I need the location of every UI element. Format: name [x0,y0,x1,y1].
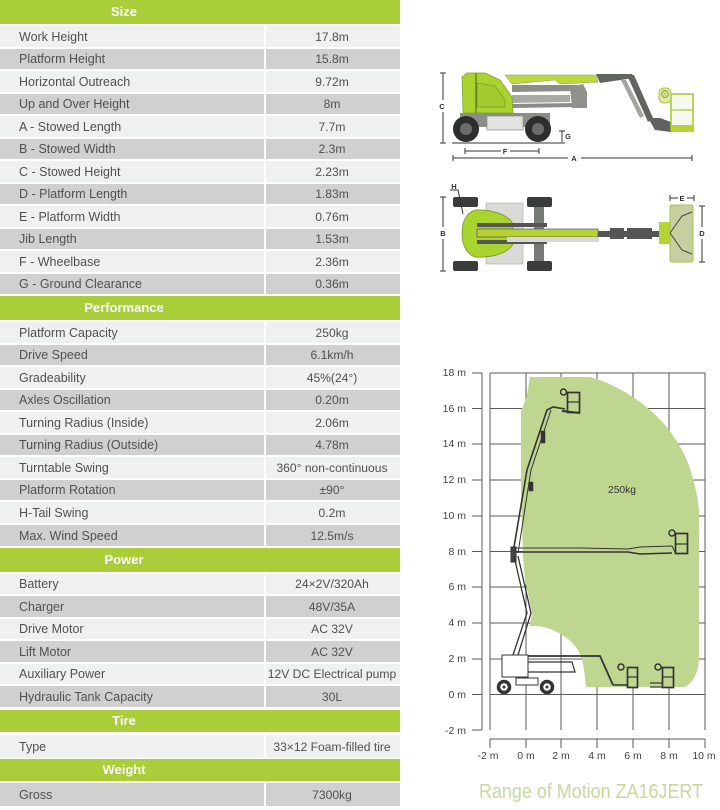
y axis labels: -2 m [445,725,466,737]
row: Platform Rotation: Platform Rotation [19,483,116,497]
row: A - Stowed Length: A - Stowed Length [19,120,121,134]
row: Type: Type [19,740,46,754]
heading: Tire: Tire [112,713,136,728]
row: Platform Height: 15.8m [315,52,349,66]
row: Work Height [0,26,400,47]
row: Max. Wind Speed: Max. Wind Speed [19,528,118,542]
icon: platform from above [659,205,693,262]
row: F - Wheelbase [0,251,400,272]
row: H-Tail Swing: 0.2m [319,506,345,520]
row: C - Stowed Height: C - Stowed Height [19,164,120,178]
row: Battery [0,574,400,594]
icon: platform [659,88,694,132]
diagram: side view of lift [439,73,694,163]
y axis labels: 4 m [448,617,466,629]
dimension lines and letters [440,73,692,161]
row: Max. Wind Speed: 12.5m/s [310,528,354,542]
row: Type: 33×12 Foam-filled tire [273,740,391,754]
x axis labels: 8 m [660,750,678,762]
dimension labels: B [440,229,446,238]
heading: Power [0,548,400,572]
row: Hydraulic Tank Capacity: Hydraulic Tank Capacity [19,690,153,704]
row: Turntable Swing: Turntable Swing [19,460,109,474]
row: Charger: Charger [19,600,64,614]
row: Turntable Swing: 360° non-continuous [276,460,388,474]
icon: axle [534,207,544,261]
row: Turning Radius (Outside): 4.78m [315,438,349,452]
row: G - Ground Clearance: G - Ground Clearance [19,277,142,291]
dimension labels: G [565,132,571,141]
row: Jib Length: 1.53m [315,232,349,246]
lift at full height [513,389,580,553]
row: Turntable Swing [0,457,400,478]
working envelope [521,377,699,687]
heading: Performance: Performance [84,300,164,315]
row: Work Height: Work Height [19,30,88,44]
grid [472,373,705,748]
x axis labels: 4 m [588,750,606,762]
row: Up and Over Height [0,94,400,114]
heading: Size: Size [111,4,137,19]
y axis labels: 0 m [448,689,466,701]
row: A - Stowed Length: 7.7m [319,120,345,134]
row: Drive Motor: AC 32V [311,622,353,636]
row: C - Stowed Height: 2.23m [315,164,349,178]
row: Lift Motor: Lift Motor [19,644,71,658]
row: Platform Height [0,49,400,69]
row: B - Stowed Width [0,139,400,159]
icon: wheels [453,197,552,271]
dimension labels [440,182,705,238]
y axis labels: 18 m [443,367,466,379]
row: Lift Motor [0,641,400,662]
row: Battery: 24×2V/320Ah [295,577,369,591]
row: Platform Rotation [0,480,400,500]
dimension labels: C [439,102,445,111]
y axis labels: 6 m [448,581,466,593]
row: Gross: 7300kg [312,788,352,802]
row: Gradeability [0,367,400,388]
row: Hydraulic Tank Capacity: 30L [322,690,342,704]
y axis labels [443,367,466,737]
row: Gross [0,783,400,806]
row: Turning Radius (Inside): 2.06m [315,416,349,430]
dimension labels: H [451,182,457,191]
row: H-Tail Swing [0,502,400,523]
row: Jib Length: Jib Length [19,232,77,246]
dimension labels [439,102,577,163]
lowered platform [613,664,638,688]
dimension labels: D [699,229,705,238]
row: Drive Motor [0,619,400,639]
panel: specification table [0,0,400,806]
heading: Weight [0,759,400,781]
row: Battery: Battery [19,577,59,591]
row: F - Wheelbase: 2.36m [315,254,349,268]
row: Axles Oscillation: 0.20m [315,393,349,407]
row: Turning Radius (Inside): Turning Radius (Inside) [19,416,148,430]
row: Auxiliary Power: 12V DC Electrical pump [268,667,396,681]
diagram: top view of lift [440,182,705,271]
row: Platform Capacity: 250kg [316,326,348,340]
row: Turning Radius (Outside) [0,435,400,455]
row: Work Height: 17.8m [315,30,349,44]
chart: range of motion [443,367,716,762]
row: E - Platform Width [0,206,400,227]
row: Turning Radius (Inside) [0,412,400,433]
heading: Power: Power [104,552,144,567]
row: Up and Over Height: Up and Over Height [19,97,129,111]
row: Platform Capacity [0,322,400,343]
icon: cab from above [462,210,513,257]
x axis labels: 10 m [692,750,716,762]
row: Horizontal Outreach [0,71,400,92]
row: F - Wheelbase: F - Wheelbase [19,254,100,268]
dimension labels: E [679,194,685,203]
row: D - Platform Length [0,184,400,204]
x axis labels: 6 m [624,750,642,762]
row: Auxiliary Power [0,664,400,684]
y axis labels: 8 m [448,546,466,558]
row: Lift Motor: AC 32V [311,644,353,658]
row: E - Platform Width: E - Platform Width [19,210,120,224]
row: Charger: 48V/35A [309,600,355,614]
row: B - Stowed Width: B - Stowed Width [19,142,116,156]
row: Axles Oscillation [0,390,400,410]
y axis labels: 10 m [443,510,466,522]
y axis labels: 16 m [443,403,466,415]
y axis labels: 2 m [448,653,466,665]
row: Platform Capacity: Platform Capacity [19,326,118,340]
icon: rear wheel [525,116,551,142]
row: Max. Wind Speed [0,525,400,546]
row: Gross: Gross [19,788,52,802]
row: Up and Over Height: 8m [324,97,340,111]
row: G - Ground Clearance: 0.36m [315,277,349,291]
row: Hydraulic Tank Capacity [0,686,400,707]
heading: Tire [0,710,400,732]
capacity label: 250kg [608,484,636,496]
dimension lines and letters [440,190,705,271]
heading: Weight: Weight [102,762,146,777]
icon: boom from above [477,223,660,244]
row: Drive Speed: Drive Speed [19,348,88,362]
icon: counterweight body [486,203,523,264]
x axis labels: -2 m [478,750,499,762]
row: Drive Speed: 6.1km/h [310,348,354,362]
row: Jib Length [0,229,400,249]
row: Axles Oscillation: Axles Oscillation [19,393,111,407]
icon: boom arm [505,74,671,132]
lift stowed base [498,655,613,692]
heading: Performance [0,296,400,320]
y axis labels: 14 m [443,438,466,450]
row: Platform Rotation: ±90° [320,483,344,497]
row: D - Platform Length: 1.83m [315,187,349,201]
row: Gradeability: 45%(24°) [307,370,357,384]
row: H-Tail Swing: H-Tail Swing [19,506,88,520]
row: Turning Radius (Outside): Turning Radius (Outside) [19,438,158,452]
icon: chassis [460,113,550,130]
row: D - Platform Length: D - Platform Length [19,187,127,201]
row: E - Platform Width: 0.76m [315,210,349,224]
row: Drive Speed [0,345,400,365]
row: Drive Motor: Drive Motor [19,622,84,636]
lower mast [513,556,531,655]
lift at horizontal outreach [511,530,688,562]
row: C - Stowed Height [0,161,400,182]
icon: cab [462,73,513,113]
dimension labels: A [571,154,577,163]
row: Type [0,735,400,758]
row: Gradeability: Gradeability [19,370,86,384]
icon: front wheel [453,116,479,142]
row: Auxiliary Power: Auxiliary Power [19,667,105,681]
row: A - Stowed Length [0,116,400,137]
row: Platform Height: Platform Height [19,52,105,66]
dimension labels: F [503,147,508,156]
heading: Size [0,0,400,24]
row: Horizontal Outreach: Horizontal Outreach [19,74,130,88]
y axis labels: 12 m [443,474,466,486]
x axis labels: 0 m [517,750,535,762]
x axis labels: 2 m [552,750,570,762]
row: Charger [0,596,400,617]
rotated platform [650,664,674,688]
x axis labels [478,750,716,762]
row: B - Stowed Width: 2.3m [319,142,345,156]
row: G - Ground Clearance [0,274,400,294]
row: Horizontal Outreach: 9.72m [315,74,349,88]
